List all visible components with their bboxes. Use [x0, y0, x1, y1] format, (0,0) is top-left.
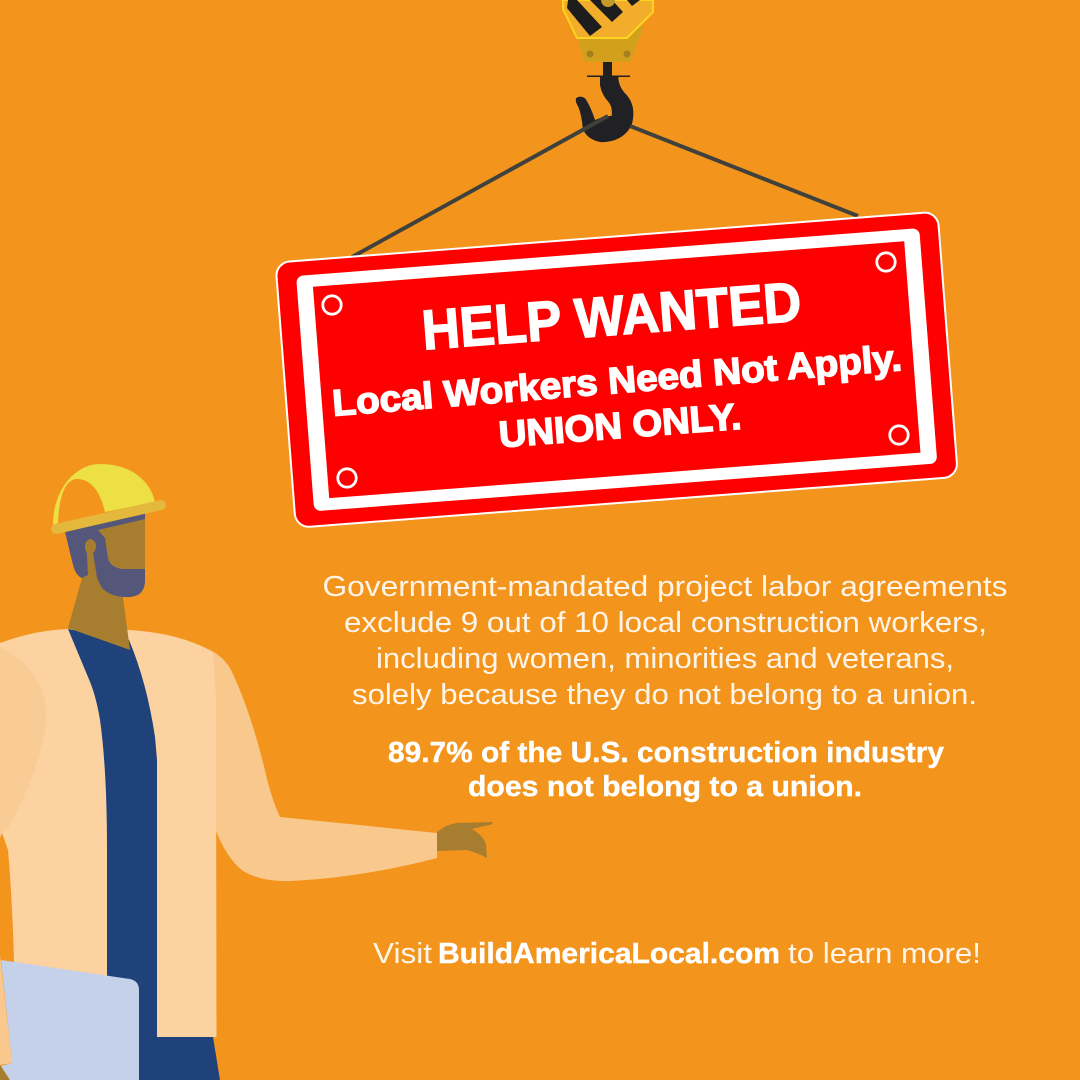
callout statistic: does not belong to a union.	[468, 771, 862, 803]
body text: exclude 9 out of 10 local construction workers,	[344, 607, 987, 639]
body text	[322, 571, 1008, 711]
call to action	[373, 938, 981, 970]
lower hand	[0, 1065, 10, 1080]
face	[98, 519, 145, 569]
body text: including women, minorities and veterans,	[376, 643, 954, 675]
call to action: Visit	[373, 938, 432, 970]
blue shirt	[68, 629, 220, 1080]
hard hat	[53, 464, 155, 525]
illustration: construction worker	[0, 464, 493, 1080]
left arm shade	[0, 647, 46, 838]
body text: Government-mandated project labor agreements	[322, 571, 1008, 603]
crane cables	[352, 116, 858, 257]
neck	[68, 539, 130, 650]
body text: solely because they do not belong to a union.	[352, 679, 977, 711]
sign union only: UNION ONLY.	[497, 396, 743, 455]
forearm at clipboard	[0, 955, 12, 1065]
sign rivets	[323, 253, 908, 487]
hat brim	[56, 505, 161, 529]
sign subhead: Local Workers Need Not Apply.	[331, 337, 903, 424]
call to action: BuildAmericaLocal.com	[438, 938, 780, 970]
icon: crane hook	[563, 0, 653, 142]
call to action: to learn more!	[788, 938, 981, 970]
sleeve: pointing arm	[205, 648, 437, 881]
callout statistic: 89.7% of the U.S. construction industry	[388, 737, 944, 769]
sign headline: HELP WANTED	[420, 270, 803, 362]
panel: help wanted sign	[275, 212, 958, 528]
hair and beard	[65, 513, 145, 597]
jacket	[0, 629, 216, 1080]
callout statistic	[388, 737, 944, 803]
icon: hand	[437, 822, 493, 858]
sign plate	[275, 212, 958, 528]
clipboard	[1, 960, 139, 1080]
